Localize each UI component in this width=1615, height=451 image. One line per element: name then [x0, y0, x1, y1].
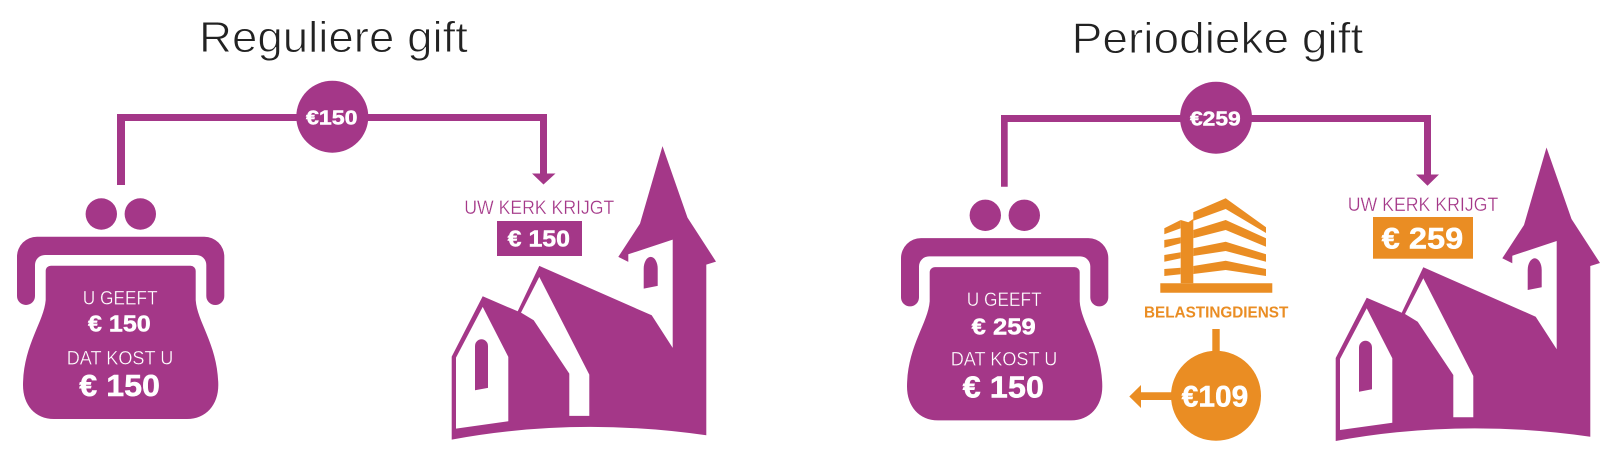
label: belastingdienst: BELASTINGDIENST [1144, 304, 1289, 321]
icon: purse [901, 200, 1108, 420]
amount circle: 150: €150 [306, 107, 358, 129]
amount circle: 259: €259 [1190, 109, 1241, 131]
icon: purse: U GEEFT [967, 289, 1042, 311]
panel: periodieke gift [901, 14, 1600, 441]
amount circle: 259 [1180, 82, 1252, 154]
icon: church [1336, 148, 1600, 441]
title: reguliere gift: Reguliere gift [199, 13, 468, 62]
amount circle: 150 [296, 81, 368, 153]
amount circle: 109 with arrow: €109 [1182, 381, 1248, 414]
callout: uw kerk krijgt [1348, 194, 1498, 259]
icon: purse: € 150 [963, 371, 1044, 405]
panel: reguliere gift [17, 13, 716, 440]
arrow: connector from purse to church [117, 114, 556, 185]
amount circle: 109 with arrow [1129, 329, 1261, 441]
icon: purse: € 150 [88, 311, 151, 337]
icon: purse: U GEEFT [83, 287, 158, 309]
callout: uw kerk krijgt: UW KERK KRIJGT [464, 197, 614, 219]
icon: purse: DAT KOST U [951, 349, 1057, 371]
callout: uw kerk krijgt [464, 197, 614, 256]
icon: purse: DAT KOST U [67, 347, 173, 369]
callout: uw kerk krijgt: € 259 [1382, 222, 1463, 255]
icon: belastingdienst building [1160, 198, 1272, 293]
callout: uw kerk krijgt: € 150 [508, 226, 570, 252]
title: periodieke gift: Periodieke gift [1072, 14, 1363, 63]
icon: purse [17, 198, 224, 419]
icon: purse: € 150 [79, 369, 160, 403]
callout: uw kerk krijgt: UW KERK KRIJGT [1348, 194, 1498, 216]
arrow: connector from purse to church [1001, 115, 1439, 187]
icon: purse: € 259 [972, 313, 1036, 339]
icon: church [452, 146, 716, 440]
